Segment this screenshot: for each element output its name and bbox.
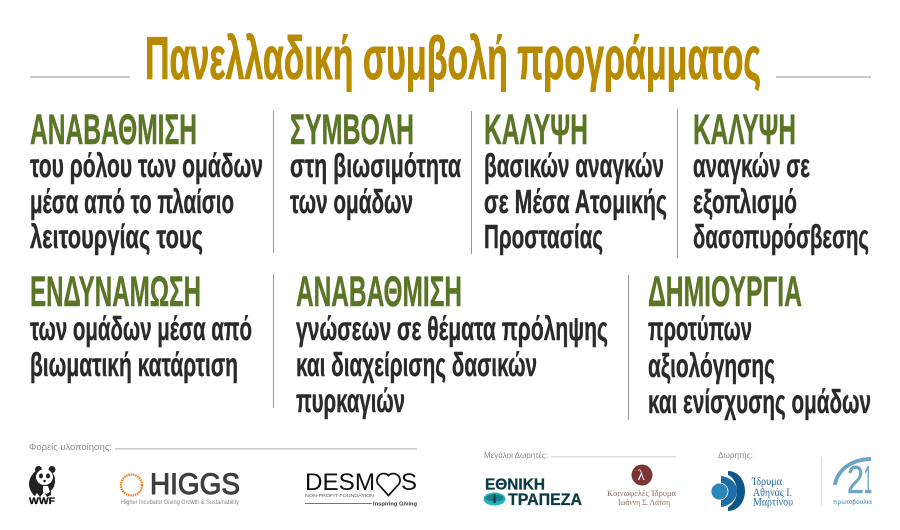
logo: HIGGS: HIGGS (150, 468, 240, 501)
text block: empowerment: των ομάδων μέσα από (30, 310, 252, 347)
logo: HIGGS: Higher Incubator Giving Growth & Sustainability (121, 500, 239, 506)
logo: 21 initiative: 2 (847, 459, 864, 502)
text block: knowledge upgrade (296, 268, 608, 419)
logo: DESMOS: NON-PROFIT FOUNDATION (305, 493, 374, 498)
logo: 21 initiative (833, 457, 872, 506)
text block: empowerment: ΕΝΔΥΝΑΜΩΣΗ (30, 268, 201, 316)
logo: Martinos foundation: Ίδρυμα (751, 474, 783, 488)
text block: firefighting equipment (693, 106, 869, 255)
logo: Latsis foundation: Κοινωφελές Ίδρυμα (607, 488, 677, 498)
text block: sustainability (290, 106, 461, 220)
logo: Martinos foundation: Μαρτίνου (753, 494, 793, 508)
logo: DESMOS: S (401, 469, 417, 496)
logo: WWF panda: WWF (29, 496, 55, 507)
logo: Latsis foundation: λ (638, 468, 646, 484)
text block: creation of standards (648, 268, 871, 420)
text: 1 (864, 459, 872, 502)
text block: firefighting equipment: αναγκών σε (693, 147, 810, 184)
text block: knowledge upgrade: πυρκαγιών (296, 382, 405, 419)
label: major donors: Μεγάλοι Δωρητές: (484, 450, 548, 460)
text block: firefighting equipment: ΚΑΛΥΨΗ (693, 106, 796, 154)
logo: National Bank of Greece: ΤΡΑΠΕΖΑ (508, 491, 582, 509)
logo: National Bank of Greece: ΕΘΝΙΚΗ (485, 476, 545, 494)
text block: sustainability: στη βιωσιμότητα (290, 147, 461, 184)
text block: protective equipment (484, 106, 667, 255)
text block: knowledge upgrade: γνώσεων σε θέματα πρόληψης (296, 310, 608, 347)
text block: empowerment (30, 268, 252, 383)
text block: role upgrade: μέσα από το πλαίσιο (30, 183, 234, 220)
logo: WWF panda (29, 466, 56, 507)
logo: Latsis foundation (607, 464, 677, 507)
logo: Martinos foundation: Αθηνάς Ι. (753, 485, 792, 499)
text block: protective equipment: Προστασίας (484, 218, 603, 255)
text block: protective equipment: ΚΑΛΥΨΗ (484, 106, 588, 154)
logo: HIGGS (121, 468, 240, 506)
text block: protective equipment: βασικών αναγκών (484, 147, 664, 184)
text block: sustainability: των ομάδων (290, 183, 413, 220)
label: donor: Δωρητής: (718, 450, 753, 460)
text block: creation of standards: αξιολόγησης (648, 347, 775, 384)
text block: role upgrade (30, 106, 263, 255)
text block: empowerment: βιωματική κατάρτιση (30, 346, 238, 383)
logo: 21 initiative: πρωτοβουλία (833, 498, 872, 506)
label: implementers: Φορείς υλοποίησης: (29, 442, 112, 452)
text block: creation of standards: προτύπων (648, 310, 752, 347)
text block: role upgrade: του ρόλου των ομάδων (30, 147, 263, 184)
text block: sustainability: ΣΥΜΒΟΛΗ (290, 106, 414, 154)
logo: Martinos foundation (711, 471, 793, 511)
logo: DESMOS: DESM (305, 469, 375, 496)
text block: role upgrade: ΑΝΑΒΑΘΜΙΣΗ (30, 106, 197, 154)
text block: role upgrade: λειτουργίας τους (30, 218, 203, 255)
logo: National Bank of Greece (484, 476, 582, 509)
text block: protective equipment: σε Μέσα Ατομικής (484, 183, 667, 220)
logo: DESMOS (305, 469, 417, 508)
logo: DESMOS: Inspiring Giving (373, 502, 417, 508)
text block: firefighting equipment: εξοπλισμό (693, 183, 797, 220)
text block: knowledge upgrade: και διαχείρισης δασικών (296, 346, 537, 383)
text block: knowledge upgrade: ΑΝΑΒΑΘΜΙΣΗ (296, 268, 462, 316)
logo: Latsis foundation: Ιωάννη Σ. Λάτση (618, 497, 670, 507)
